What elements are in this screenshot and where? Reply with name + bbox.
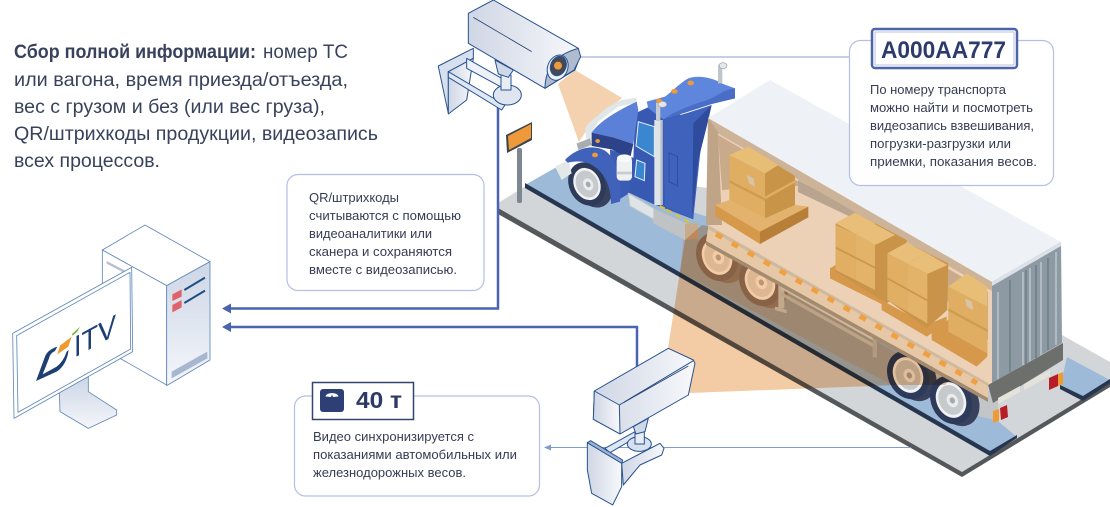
heading text: collected information: вес с грузом и без (или вес груза), xyxy=(14,96,325,118)
cargo: large pallet box at front xyxy=(715,147,808,244)
panel: QR codes info: считываются с помощью xyxy=(309,208,461,223)
panel: weight info: показаниями автомобильных или xyxy=(313,447,517,462)
trailer undercarriage xyxy=(775,273,877,357)
heading text: collected information: всех процессов. xyxy=(14,150,160,172)
camera view cone: bottom camera xyxy=(668,225,985,393)
panel: weight info: железнодорожных весов. xyxy=(313,465,466,480)
panel: licence plate info: можно найти и посмотреть xyxy=(870,100,1033,115)
panel: QR codes info: вместе с видеозаписью. xyxy=(309,262,457,277)
panel: licence plate info: приемки, показания весов. xyxy=(870,154,1037,169)
trailer wheels: rear axle 2 xyxy=(922,366,987,436)
trailer wheels: front axle 1 xyxy=(688,223,753,293)
panel: QR codes info: видеоаналитики или xyxy=(309,226,432,241)
heading text: collected information: QR/штрихкоды продукции, видеозапись xyxy=(14,123,378,145)
connector: top camera to licence plate panel xyxy=(580,56,849,58)
cargo: middle stacks of boxes xyxy=(830,213,948,337)
panel: QR codes info: QR/штрихкоды xyxy=(309,190,399,205)
display post xyxy=(506,122,532,203)
trailer xyxy=(706,80,1063,423)
weight badge xyxy=(312,382,414,420)
panel: licence plate info: видеозапись взвешивания, xyxy=(870,118,1034,133)
connector: bottom camera to weight panel xyxy=(544,444,911,450)
heading text: collected information: Сбор полной информации: xyxy=(14,41,256,63)
heading text: collected information xyxy=(14,41,378,172)
licence plate xyxy=(872,29,1017,68)
camera bottom xyxy=(587,348,695,505)
weight badge: 40 т xyxy=(356,387,402,413)
panel: QR codes info xyxy=(287,174,484,290)
trailer wheels: rear axle 1 xyxy=(879,341,944,411)
panel: weight info: Видео синхронизируется с xyxy=(313,429,474,444)
ITV logo xyxy=(36,308,116,381)
camera top xyxy=(438,0,581,114)
licence plate: А000АА777 xyxy=(881,37,1006,64)
connection line: top camera to server xyxy=(222,100,498,314)
heading text: collected information: номер ТС xyxy=(263,41,348,63)
panel: licence plate info: погрузки-разгрузки или xyxy=(870,136,1011,151)
truck cab xyxy=(555,63,735,240)
ITV logo: ITV xyxy=(74,308,116,365)
trailer wheels: front axle 2 xyxy=(731,248,796,318)
weighbridge platform xyxy=(498,168,1110,477)
server and monitor xyxy=(13,225,210,428)
truck front wheel xyxy=(561,154,620,216)
panel: licence plate info xyxy=(850,40,1054,186)
connection line: bottom camera to server xyxy=(222,322,637,370)
panel: licence plate info: По номеру транспорта xyxy=(870,82,1007,97)
panel: weight info xyxy=(294,396,540,496)
cargo: large pallet box at rear xyxy=(932,273,987,367)
camera view cone: top camera xyxy=(558,70,622,142)
heading text: collected information: или вагона, время приезда/отъезда, xyxy=(14,69,348,91)
panel: QR codes info: сканера и сохраняются xyxy=(309,244,452,259)
